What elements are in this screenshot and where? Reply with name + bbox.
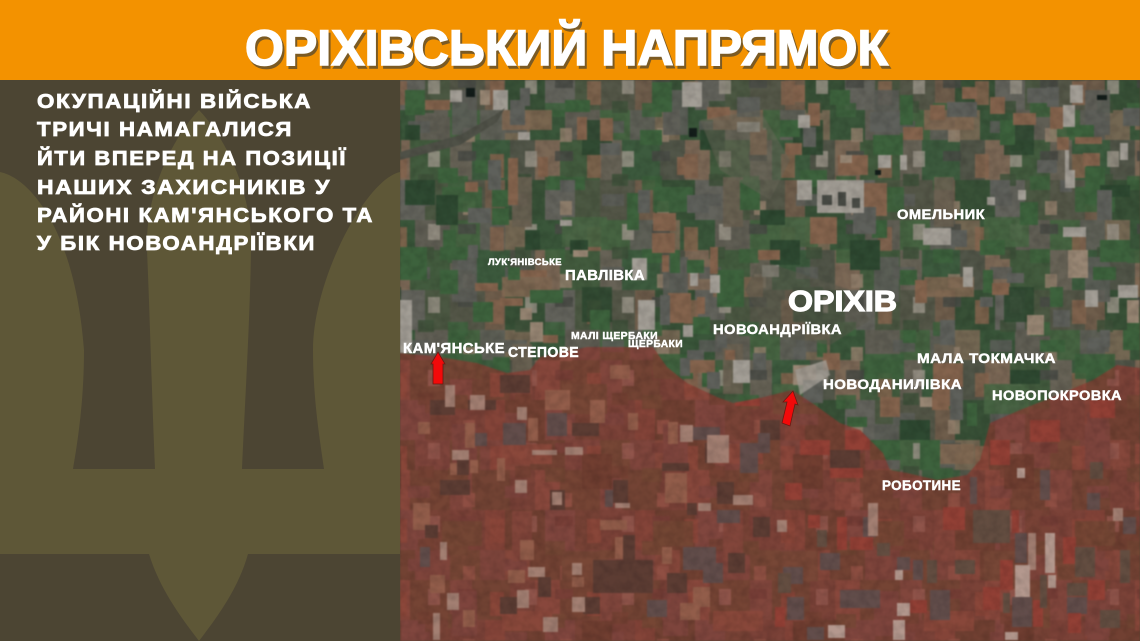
place labels: ПАВЛІВКА [565,268,645,284]
place labels: НОВОПОКРОВКА [992,387,1122,403]
panel: left sidebar background [0,80,400,641]
text block: summary: ЙТИ ВПЕРЕД НА ПОЗИЦІЇ [37,146,347,170]
place labels: КАМ'ЯНСЬКЕ [403,340,505,357]
place labels: НОВОАНДРІЇВКА [713,321,842,337]
text block: summary: ОКУПАЦІЙНІ ВІЙСЬКА [37,89,312,113]
arrow: attack toward Novoandriivka [782,391,798,426]
text block: summary: ТРИЧІ НАМАГАЛИСЯ [37,118,293,141]
place labels: ОРІХІВ [788,286,897,318]
panel: satellite map [400,80,1140,641]
place labels: ОМЕЛЬНИК [897,206,985,222]
map fields: unoccupied territory [400,82,1140,470]
text block: summary [37,89,374,255]
place labels [403,206,1122,493]
title: ОРІХІВСЬКИЙ НАПРЯМОК [245,19,888,76]
place labels: ЛУК'ЯНІВСЬКЕ [488,257,562,267]
header bar [0,0,1140,80]
text block: summary: НАШИХ ЗАХИСНИКІВ У [37,176,331,199]
text block: summary: У БІК НОВОАНДРІЇВКИ [37,232,316,255]
place labels: МАЛА ТОКМАЧКА [917,350,1056,366]
place labels: МАЛІ ЩЕРБАКИ [571,330,658,342]
place labels: РОБОТИНЕ [882,477,961,493]
place labels: ЩЕРБАКИ [628,338,683,350]
arrow: attack near Kamianske [431,352,445,384]
map: grain texture [400,80,1140,641]
icon: trident emblem [0,110,400,641]
text block: summary: РАЙОНІ КАМ'ЯНСЬКОГО ТА [37,203,374,227]
place labels: СТЕПОВЕ [508,344,579,361]
place labels: НОВОДАНИЛІВКА [823,376,962,392]
map: occupied territory shading [400,340,1140,641]
